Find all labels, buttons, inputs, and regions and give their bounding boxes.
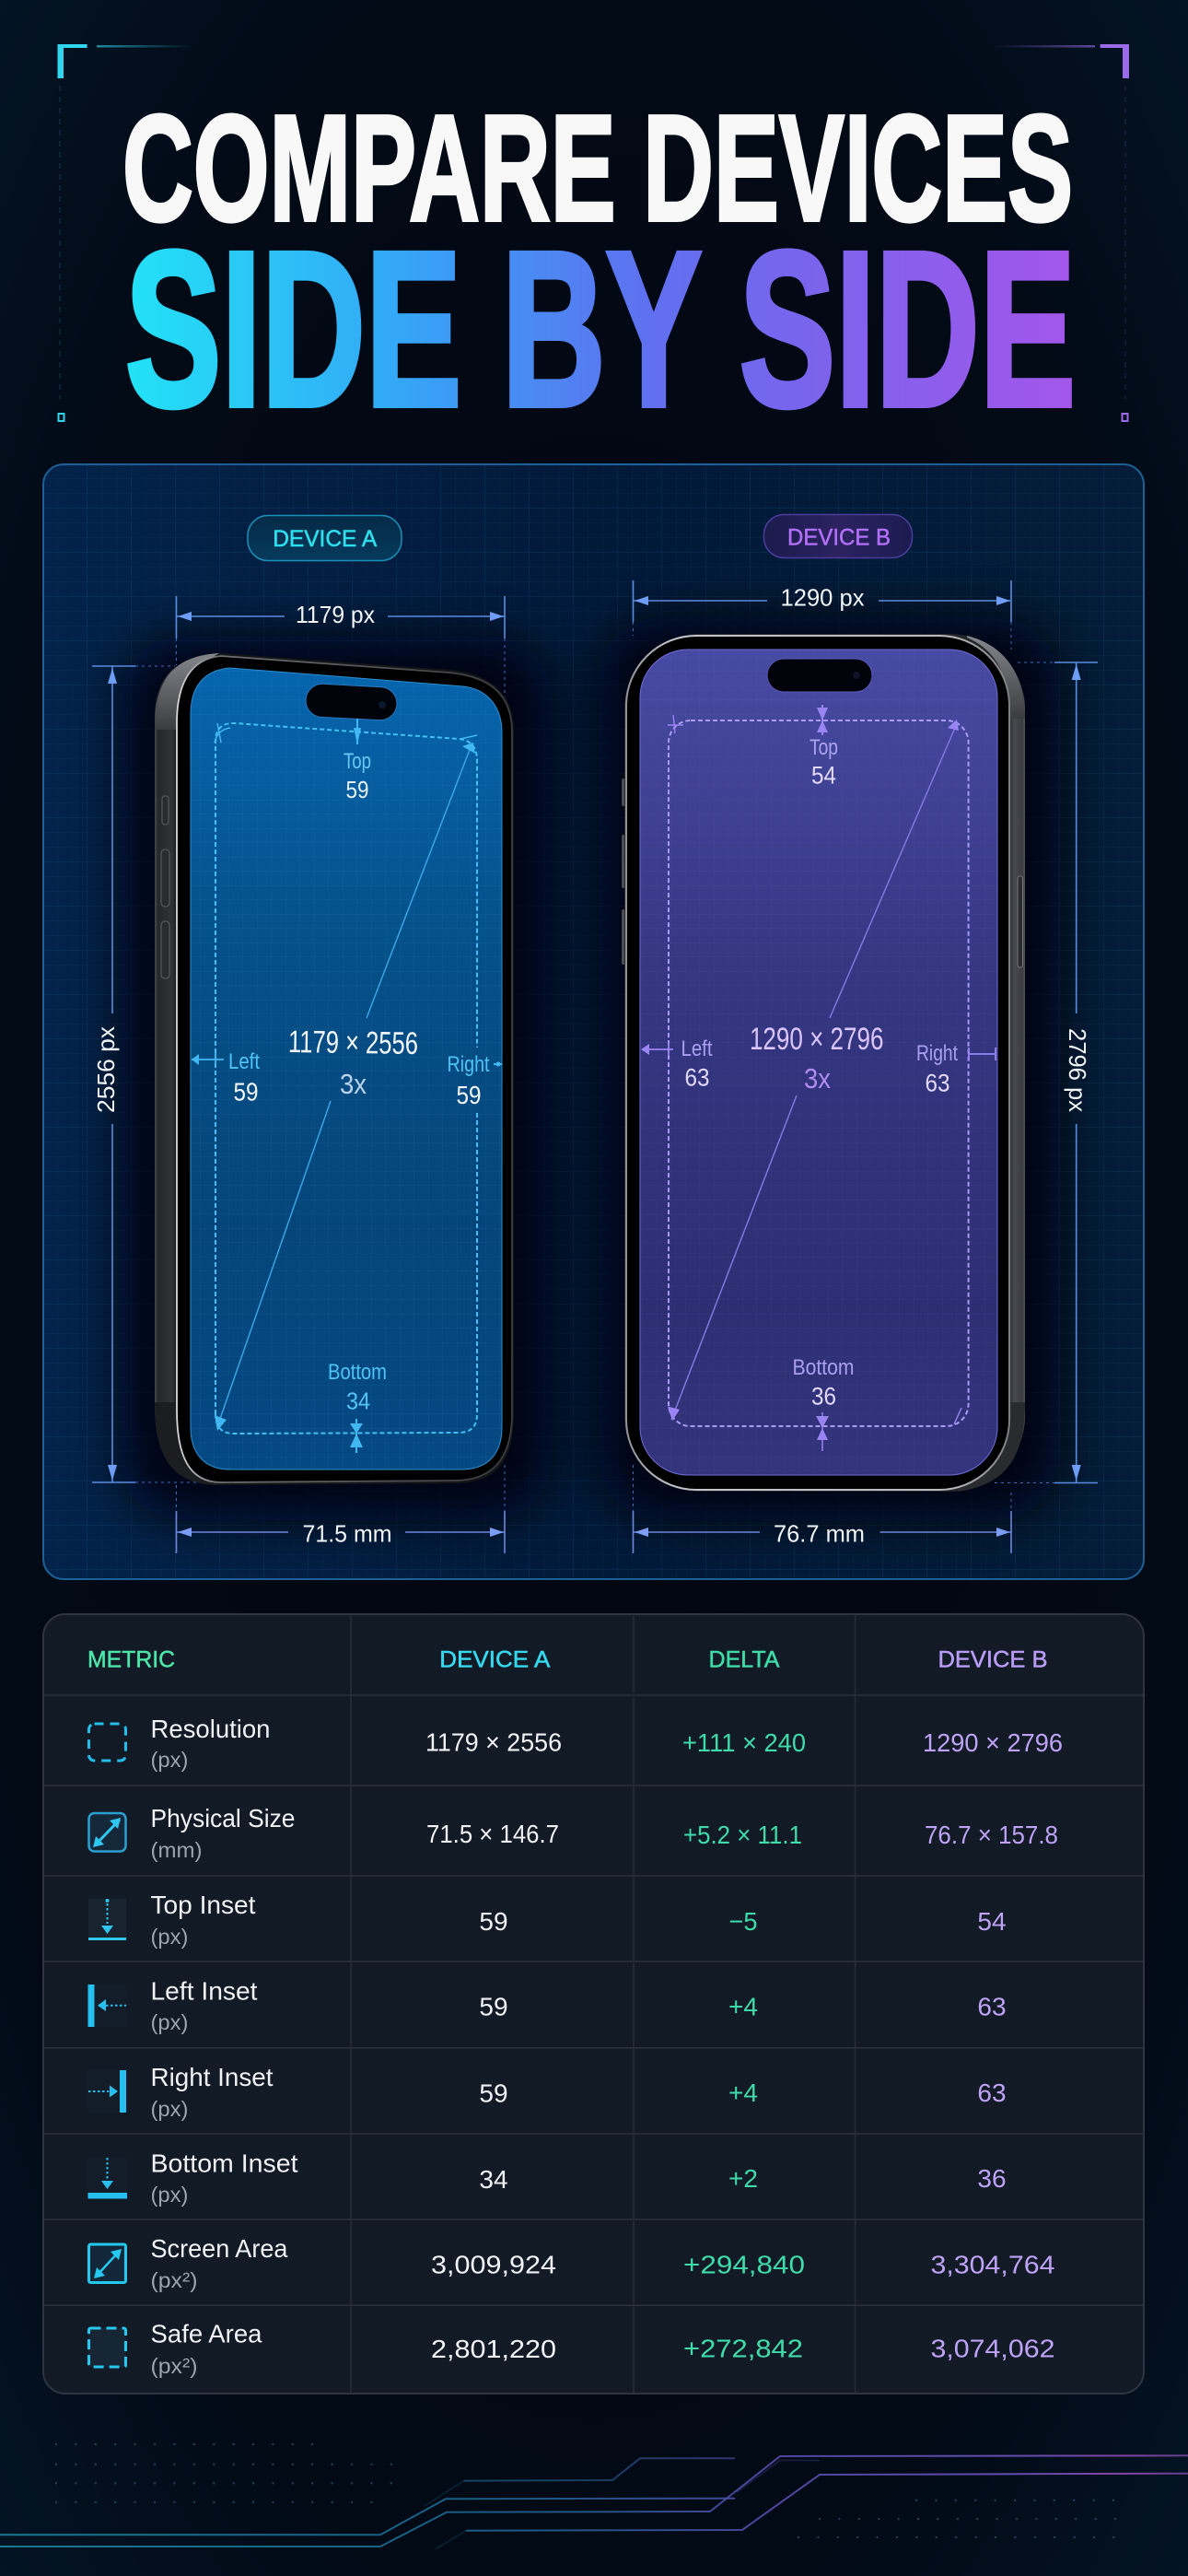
phone B inset arrows xyxy=(641,705,996,1451)
row: Left Inset xyxy=(88,1977,1007,2034)
row: Left Inset: +4 xyxy=(728,1992,758,2021)
phone A readouts: Top xyxy=(344,749,371,774)
row: Safe Area: +272,842 xyxy=(683,2335,803,2362)
phone B readouts: 1290 × 2796 xyxy=(750,1022,883,1057)
row: Resolution: 1179 × 2556 xyxy=(425,1728,562,1756)
phone B diagonal arrow xyxy=(668,715,961,1424)
row: Bottom Inset: 34 xyxy=(479,2165,508,2194)
phone A inset arrows xyxy=(192,719,502,1453)
phone B readouts: Bottom xyxy=(792,1355,855,1380)
row: Bottom Inset xyxy=(87,2149,1007,2207)
phone: Device B xyxy=(622,634,1025,1492)
row: Bottom Inset: +2 xyxy=(728,2164,758,2193)
header frame: corner brackets xyxy=(57,44,1129,421)
dimension: Device A width 71.5 mm: 71.5 mm xyxy=(302,1520,392,1548)
label: Device A pill xyxy=(248,516,402,560)
row: Safe Area xyxy=(88,2320,1055,2378)
row: Screen Area: (px²) xyxy=(151,2268,197,2292)
icon: left inset xyxy=(88,1985,126,2027)
row: Screen Area: +294,840 xyxy=(683,2250,805,2279)
title xyxy=(122,84,1076,452)
row: Physical Size: (mm) xyxy=(151,1838,203,1862)
row: Safe Area: 2,801,220 xyxy=(431,2335,556,2363)
phone A side buttons xyxy=(161,796,169,978)
phone A readouts: Bottom xyxy=(328,1360,387,1385)
row: Physical Size: +5.2 × 11.1 xyxy=(683,1821,802,1849)
row: Physical Size xyxy=(88,1804,1058,1862)
phone A safe area outline xyxy=(215,723,477,1434)
dimension: Device B height 2796 px: 2796 px xyxy=(1064,1028,1091,1112)
dimension: Device B width 76.7 mm xyxy=(634,1465,1011,1553)
phone A bottom corner shading xyxy=(155,1402,219,1485)
row: Top Inset: −5 xyxy=(729,1907,757,1936)
phone B readouts: Top xyxy=(809,735,838,760)
phone B dynamic island xyxy=(767,659,872,692)
phone A screen xyxy=(191,668,502,1469)
footer circuit decoration xyxy=(0,2444,1188,2549)
row: Top Inset: 54 xyxy=(977,1907,1007,1936)
icon: dashed resolution frame xyxy=(88,1724,125,1761)
row: Left Inset: 59 xyxy=(479,1992,508,2021)
phone A readouts xyxy=(228,749,490,1415)
phone A readouts: 1179 × 2556 xyxy=(288,1025,418,1061)
row: Safe Area: (px²) xyxy=(151,2354,197,2378)
table header row: METRIC xyxy=(87,1647,175,1673)
dimension: Device A width 1179 px: 1179 px xyxy=(296,601,375,628)
dimension: Device A width 1179 px xyxy=(177,596,505,700)
phone A readouts: 59 xyxy=(346,776,368,803)
dimension: Device B width 76.7 mm: 76.7 mm xyxy=(774,1520,865,1548)
row: Right Inset xyxy=(87,2063,1007,2121)
row: Left Inset: Left Inset xyxy=(151,1977,258,2005)
row: Right Inset: 59 xyxy=(479,2078,508,2108)
row: Resolution: (px) xyxy=(151,1748,188,1772)
row: Bottom Inset: Bottom Inset xyxy=(151,2149,298,2178)
row: Physical Size: 76.7 × 157.8 xyxy=(925,1821,1058,1849)
phone A bezel xyxy=(177,656,512,1482)
row: Left Inset: (px) xyxy=(151,2010,188,2034)
row: Top Inset: (px) xyxy=(151,1925,188,1949)
label: Device A pill: DEVICE A xyxy=(273,526,378,552)
row: Left Inset: 63 xyxy=(977,1992,1007,2021)
phone B readouts: 63 xyxy=(925,1069,950,1096)
table header row: DELTA xyxy=(709,1647,780,1673)
phone A readouts: Right xyxy=(448,1052,490,1077)
row: Resolution: 1290 × 2796 xyxy=(923,1728,1063,1757)
phone A top corner highlight xyxy=(155,653,219,730)
dimension: Device B width 1290 px xyxy=(634,580,1011,650)
row: Screen Area xyxy=(88,2234,1055,2292)
row: Bottom Inset: (px) xyxy=(151,2183,188,2207)
phone B readouts: Right xyxy=(916,1041,958,1066)
phone B bottom corner shading xyxy=(958,1402,1025,1492)
row: Resolution: +111 × 240 xyxy=(682,1728,806,1757)
phone B readouts xyxy=(681,735,958,1410)
phone B bezel xyxy=(626,636,1009,1490)
row: Right Inset: (px) xyxy=(151,2097,188,2121)
row: Physical Size: 71.5 × 146.7 xyxy=(426,1820,559,1848)
phone A readouts: 59 xyxy=(457,1081,481,1109)
table header row: DEVICE B xyxy=(938,1647,1048,1673)
phone B readouts: 63 xyxy=(685,1063,709,1091)
row: Screen Area: 3,304,764 xyxy=(930,2250,1055,2279)
label: Device B pill xyxy=(764,514,912,558)
row: Right Inset: +4 xyxy=(728,2078,758,2107)
row: Right Inset: Right Inset xyxy=(151,2063,274,2091)
table header row xyxy=(87,1647,1048,1673)
phone B readouts: Left xyxy=(681,1036,713,1061)
dimension: Device A height 2556 px xyxy=(92,666,198,1482)
phone B readouts: 54 xyxy=(811,761,836,789)
dimension: Device B height 2796 px xyxy=(995,662,1098,1483)
row: Top Inset: Top Inset xyxy=(151,1891,256,1919)
row: Resolution xyxy=(88,1715,1063,1772)
row: Screen Area: Screen Area xyxy=(151,2234,288,2263)
dimension: Device A width 71.5 mm xyxy=(177,1465,505,1553)
phone B screen xyxy=(640,650,997,1475)
dimension: Device B width 1290 px: 1290 px xyxy=(781,584,864,612)
phone A dynamic island xyxy=(305,683,398,721)
dimension: Device A height 2556 px: 2556 px xyxy=(92,1026,120,1113)
panel: comparison table xyxy=(43,1614,1144,2394)
phone B safe area outline xyxy=(669,720,969,1426)
row: Resolution: Resolution xyxy=(151,1715,271,1743)
row: Top Inset xyxy=(88,1891,1007,1949)
icon: bottom inset xyxy=(87,2157,127,2198)
phone B side buttons xyxy=(622,779,626,965)
row: Safe Area: 3,074,062 xyxy=(930,2335,1055,2362)
phone A diagonal arrow xyxy=(215,723,477,1431)
label: Device B pill: DEVICE B xyxy=(787,525,891,551)
phone A readouts: 34 xyxy=(346,1388,370,1415)
panel: device comparison blueprint xyxy=(43,464,1144,1579)
phone B right side button xyxy=(1018,876,1022,967)
phone B readouts: 3x xyxy=(804,1062,831,1095)
row: Bottom Inset: 36 xyxy=(977,2164,1007,2193)
icon: physical size arrows xyxy=(88,1813,125,1852)
row: Screen Area: 3,009,924 xyxy=(431,2250,556,2279)
row: Safe Area: Safe Area xyxy=(151,2320,262,2348)
row: Top Inset: 59 xyxy=(479,1907,508,1936)
icon: dashed safe area frame xyxy=(88,2328,125,2367)
icon: screen area arrows xyxy=(88,2244,125,2283)
table header row: DEVICE A xyxy=(439,1647,551,1673)
phone A frame xyxy=(155,653,514,1485)
phone A readouts: 3x xyxy=(340,1068,367,1100)
phone A readouts: 59 xyxy=(234,1078,258,1106)
phone B frame xyxy=(624,634,1025,1492)
phone B readouts: 36 xyxy=(811,1382,836,1410)
phone A readouts: Left xyxy=(228,1049,260,1074)
row: Physical Size: Physical Size xyxy=(151,1804,295,1832)
row: Right Inset: 63 xyxy=(977,2078,1007,2107)
phone: Device A xyxy=(155,653,514,1485)
icon: right inset xyxy=(87,2070,126,2113)
icon: top inset xyxy=(88,1899,126,1940)
phone B top corner highlight xyxy=(967,636,1025,719)
